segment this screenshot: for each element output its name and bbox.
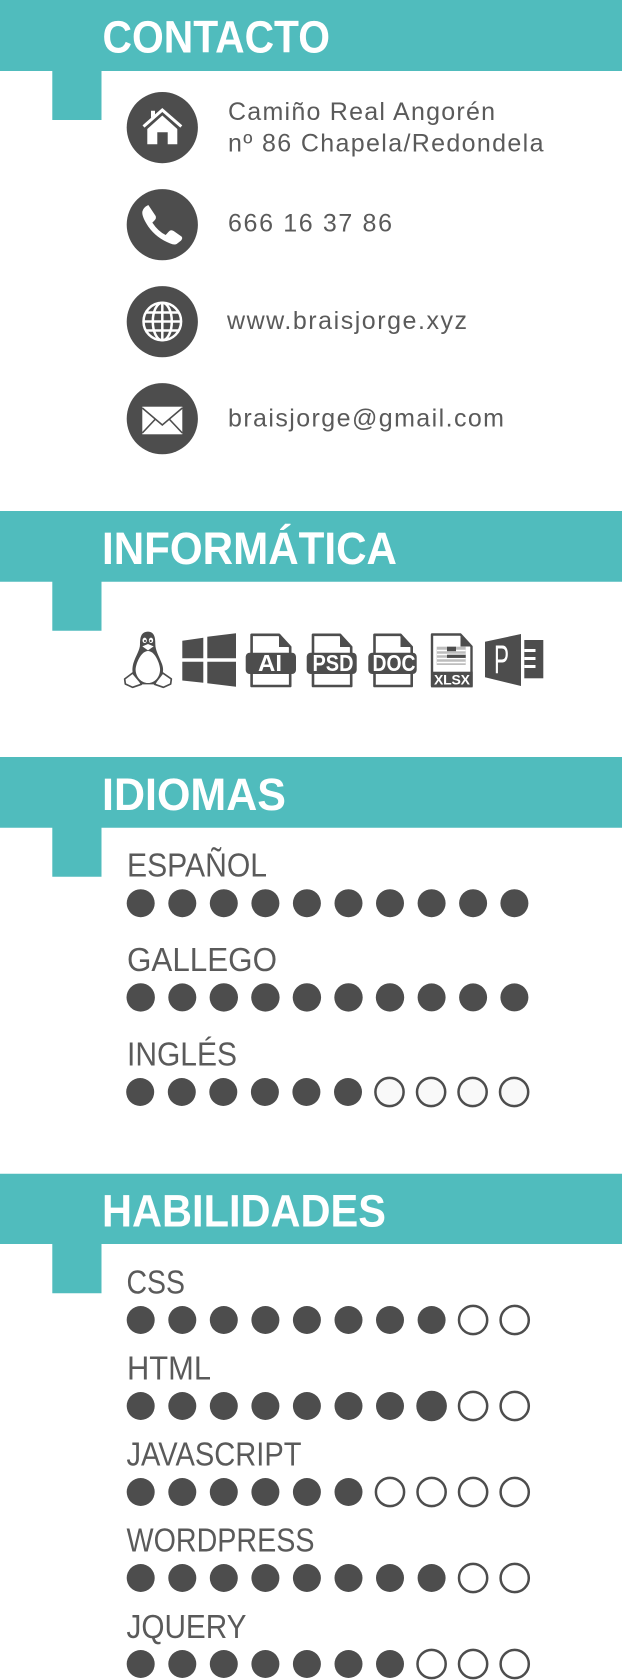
heading: idiomas: IDIOMAS [102,769,286,820]
icon: PowerPoint [485,634,543,686]
rating dots: wordpress 8/10 [127,1564,529,1592]
label: wordpress: WORDPRESS [126,1523,314,1560]
rating dots: css 8/10 [127,1306,529,1334]
rating dots: javascript 6/10 [127,1478,529,1506]
icon: globe [127,286,198,357]
icon: home [127,92,198,163]
label: css: CSS [126,1264,185,1301]
label: html: HTML [127,1350,211,1387]
rating dots: español 10/10 [127,889,528,917]
icon: envelope [127,383,198,454]
icon: DOC file [368,635,417,686]
email: braisjorge@gmail.com [228,405,504,433]
rating dots: inglés 6/10 [126,1078,528,1106]
icon: PSD file [307,635,357,686]
icon: XLSX file [431,634,473,688]
address text [228,98,544,158]
icon: PSD file: PSD [312,650,354,676]
icon: linux penguin [125,632,171,687]
panel: habilidades [0,1174,622,1678]
header band: informática [0,511,622,631]
icon: DOC file: DOC [372,650,416,676]
header band: habilidades [0,1174,622,1293]
address text: Camiño Real Angorén [228,98,495,126]
panel: idiomas [0,757,622,1106]
website: www.braisjorge.xyz [226,307,467,335]
icon: windows [182,633,236,687]
label: javascript: JAVASCRIPT [126,1436,302,1473]
panel: contacto [0,0,622,454]
heading: habilidades: HABILIDADES [102,1186,386,1237]
panel: informática [0,511,622,688]
icon: AI file [246,635,296,686]
heading: informática: INFORMÁTICA [102,523,397,574]
label: español: ESPAÑOL [127,847,267,885]
heading: contacto: CONTACTO [102,12,330,63]
rating dots: jquery 7/10 [127,1650,529,1678]
icon: AI file: AI [258,650,282,676]
header band: idiomas [0,757,622,877]
label: inglés: INGLÉS [127,1037,237,1074]
label: gallego: GALLEGO [127,942,277,979]
icon: phone [127,189,198,260]
label: jquery: JQUERY [126,1609,246,1646]
rating dots: gallego 10/10 [126,983,528,1012]
icon: XLSX file: XLSX [434,672,471,688]
phone number: 666 16 37 86 [228,210,392,238]
icon: PowerPoint: P [494,638,509,682]
rating dots: html 8/10 [127,1391,529,1421]
address text: nº 86 Chapela/Redondela [228,130,544,158]
header band: contacto [0,0,622,120]
